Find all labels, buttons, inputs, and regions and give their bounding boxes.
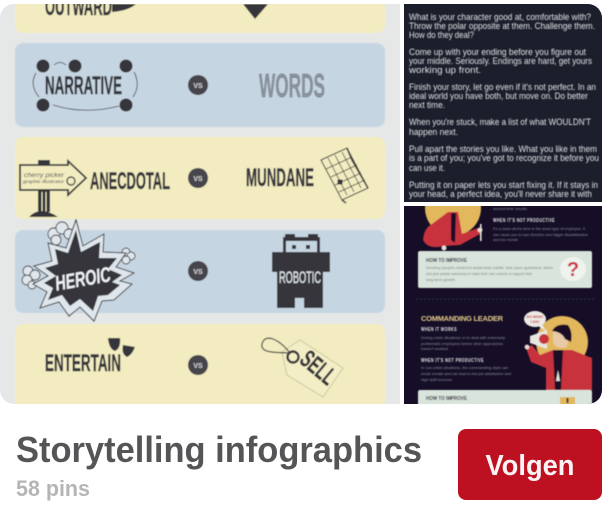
how to improve card 2: HOW TO IMPROVE xyxy=(426,396,468,402)
robotic label: ROBOTIC xyxy=(279,268,321,287)
not productive text 1: WHEN IT'S NOT PRODUCTIVE xyxy=(493,218,555,224)
vs badge: VS xyxy=(193,363,203,370)
vs badge: VS xyxy=(193,269,203,276)
follow button: Volgen xyxy=(486,450,574,482)
when not productive text: In non-crisis situations, the commanding style can xyxy=(421,365,508,370)
row: entertain vs sell xyxy=(14,324,386,404)
row: narrative vs words xyxy=(15,43,385,127)
tip paragraph 3: ideal world you have both, but move on. Do better xyxy=(409,91,588,101)
icon: price tag xyxy=(262,338,343,397)
when not productive text: erode morale and can lead to low job satisfaction and xyxy=(421,371,511,376)
icon: signpost: cherry picker xyxy=(24,172,65,179)
row: anecdotal vs mundane xyxy=(15,137,385,219)
not productive text 1: It's a wash-all-the-time in the worst type of employee. It xyxy=(493,226,586,231)
panel: main infographic preview xyxy=(0,0,400,424)
pin count: 58 pins xyxy=(16,476,90,501)
icon: calendar xyxy=(321,148,368,203)
heroic label: HEROIC xyxy=(53,263,113,296)
when it works text: During crisis situations or to deal with extremely xyxy=(421,335,505,340)
icon: clouds xyxy=(22,222,135,289)
not productive text 1: and low morale. xyxy=(493,237,519,242)
icon: warning sign xyxy=(560,397,575,407)
when it works text: problematic employees before other approaches xyxy=(421,341,503,346)
icon: robot xyxy=(272,234,330,308)
tip paragraph 2: working up front. xyxy=(408,65,481,75)
icon: story arc xyxy=(33,60,137,112)
how to improve card 1: and give people autonomy to make their own choices or support their xyxy=(426,271,533,276)
anecdotal label: ANECDOTAL xyxy=(90,168,170,195)
tip paragraph 1: How do they deal? xyxy=(409,30,474,40)
how to improve card 2 xyxy=(418,390,592,420)
panel: writing tips text xyxy=(404,4,602,202)
tip paragraph 5: can use it. xyxy=(409,163,445,173)
when it works text: haven't worked. xyxy=(421,346,449,351)
commanding leader heading: COMMANDING LEADER xyxy=(421,314,504,323)
vs badge: VS xyxy=(193,176,203,183)
speech bubble xyxy=(524,311,546,331)
vs badge: VS xyxy=(193,83,203,90)
icon: explosion xyxy=(33,220,134,321)
not productive text 1 xyxy=(493,206,588,242)
tip paragraph 3: next time. xyxy=(409,100,445,110)
tip paragraph 4: happen next. xyxy=(409,127,458,137)
narrative label: NARRATIVE xyxy=(45,72,122,100)
tip paragraph 1: Throw the polar opposite at them. Challenge them. xyxy=(409,21,595,31)
tip paragraph 6: your head, a perfect idea, you'll never share it with xyxy=(409,189,592,199)
speech bubble: I SAY xyxy=(530,320,540,324)
follow button xyxy=(458,429,602,500)
entertain label: ENTERTAIN xyxy=(45,350,121,377)
row: outward xyxy=(14,4,386,34)
how to improve card 1: long-term growth. xyxy=(426,277,456,282)
panel: leadership styles infographic xyxy=(404,206,602,404)
sell label: SELL xyxy=(294,345,342,391)
words label: WORDS xyxy=(259,67,325,104)
tip paragraph 1: What is your character good at, comfortable with? xyxy=(409,12,591,22)
how to improve card 1: Develop people-centered leadership habits. Ask open questions, listen xyxy=(426,265,553,270)
vs badge xyxy=(188,261,208,281)
board title: Storytelling infographics xyxy=(16,429,422,470)
vs badge xyxy=(188,355,208,375)
mundane label: MUNDANE xyxy=(246,164,314,192)
when not productive text: high staff turnover. xyxy=(421,377,453,382)
icon: signpost: graphic illustrator xyxy=(23,179,65,184)
how to improve card 1 xyxy=(418,251,592,288)
icon: question mark bubble: ? xyxy=(567,259,579,281)
vs badge xyxy=(188,168,208,188)
when not productive text xyxy=(421,358,511,382)
icon: signpost xyxy=(20,160,86,217)
dotted divider xyxy=(416,298,596,300)
when it works text: WHEN IT WORKS xyxy=(421,327,457,333)
row: heroic vs robotic xyxy=(15,220,385,321)
icon: theatre masks xyxy=(108,338,135,357)
illustration: commanding leader with megaphone xyxy=(524,311,592,390)
when it works text xyxy=(421,327,505,351)
not productive text 1: can cause you to lose direction and trigger dissatisfaction xyxy=(493,232,588,237)
tip paragraph 2: Come up with your ending before you figure out xyxy=(409,47,586,57)
illustration: leader with pole xyxy=(422,206,484,252)
how to improve card 1: HOW TO IMPROVE xyxy=(426,258,468,264)
when not productive text: WHEN IT'S NOT PRODUCTIVE xyxy=(421,358,484,364)
not productive text 1: around their results. xyxy=(493,206,528,211)
speech bubble: DO WHAT xyxy=(527,315,544,319)
vs badge xyxy=(188,75,208,95)
icon: question mark bubble xyxy=(560,257,586,281)
